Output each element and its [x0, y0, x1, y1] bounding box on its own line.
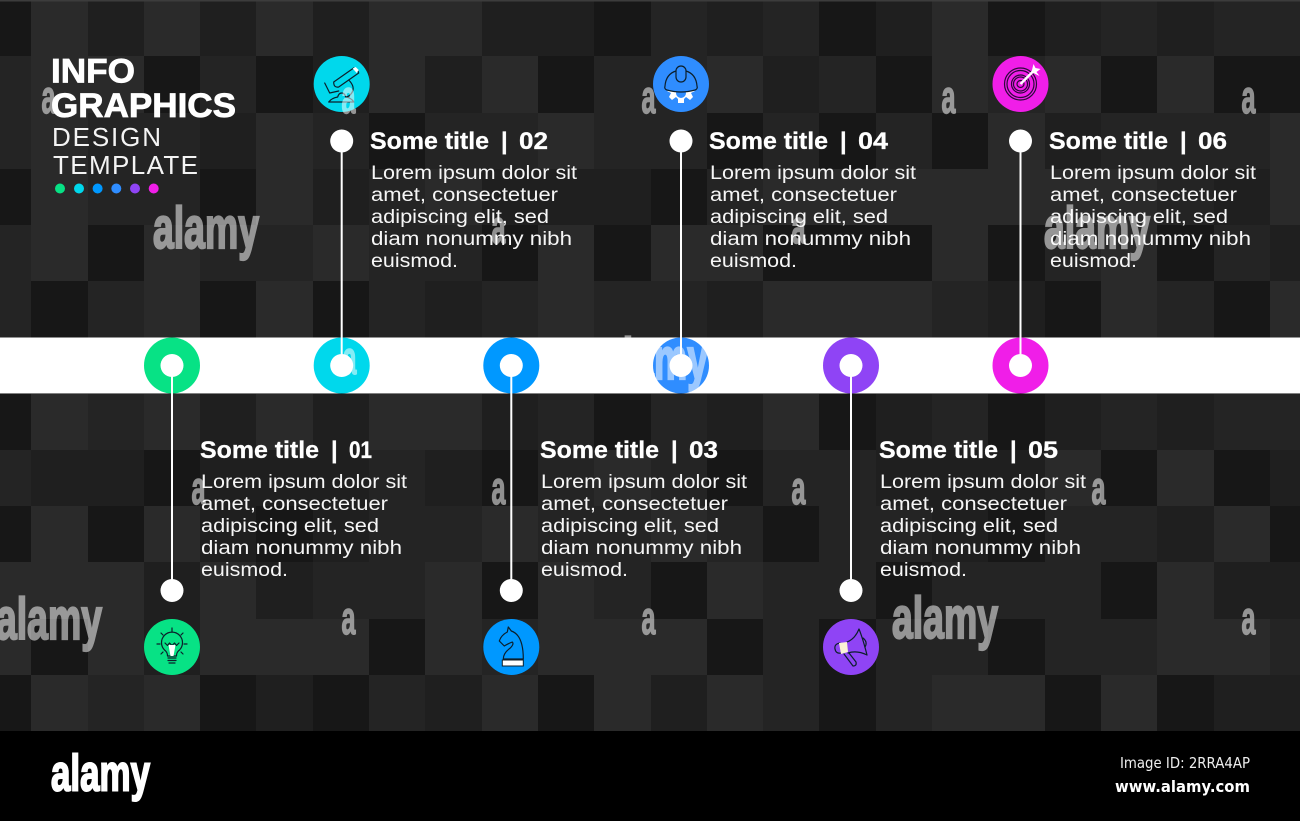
title 06: Some title: [1049, 128, 1168, 155]
body text 02: Lorem ipsum dolor sit: [371, 163, 578, 184]
body text 03: Lorem ipsum dolor sit: [541, 472, 748, 493]
title 01: [200, 437, 372, 464]
body text 01: euismod.: [201, 560, 288, 581]
connector 01: [160, 365, 184, 602]
title 05: 05: [1028, 437, 1058, 464]
title 04: 04: [858, 128, 889, 155]
body text 02: amet, consectetuer: [371, 185, 559, 206]
title 02: Some title: [370, 128, 489, 155]
body text 04: [710, 163, 917, 272]
connector 05: [840, 365, 862, 602]
watermarks: a: [1242, 592, 1256, 644]
icon: light bulb: [144, 619, 200, 675]
watermarks: a: [792, 462, 806, 514]
body text 04: adipiscing elit, sed: [710, 207, 888, 228]
title 03: 03: [689, 437, 718, 464]
watermarks: [0, 71, 1256, 652]
body text 06: adipiscing elit, sed: [1050, 207, 1228, 228]
watermarks: alamy: [892, 586, 998, 651]
body text 04: euismod.: [710, 251, 797, 272]
footer logo: alamy: [51, 744, 150, 802]
body text 04: Lorem ipsum dolor sit: [710, 163, 917, 184]
title: INFO: INFO: [51, 52, 135, 90]
body text 03: adipiscing elit, sed: [541, 516, 719, 537]
connector 06: [1009, 130, 1032, 365]
title 02: |: [501, 128, 508, 155]
step 01: [144, 338, 408, 675]
title 04: Some title: [709, 128, 828, 155]
node ring 02: [314, 338, 370, 394]
body text 05: adipiscing elit, sed: [880, 516, 1058, 537]
body text 03: diam nonummy nibh: [541, 538, 742, 559]
step 04: [653, 56, 917, 394]
body text 05: [880, 472, 1087, 581]
watermarks: a: [492, 462, 506, 514]
colour dots: [55, 184, 159, 194]
body text 01: adipiscing elit, sed: [201, 516, 379, 537]
title 04: |: [840, 128, 847, 155]
footer image id: Image ID: 2RRA4AP: [1120, 754, 1250, 772]
subtitle: TEMPLATE: TEMPLATE: [53, 150, 198, 180]
watermarks: a: [192, 462, 206, 514]
title 02: [370, 128, 548, 155]
icon: chess knight: [483, 619, 539, 675]
body text 03: amet, consectetuer: [541, 494, 729, 515]
node ring 01: [144, 338, 200, 394]
watermarks: a: [942, 71, 956, 123]
node ring 06: [992, 338, 1048, 394]
icon: target with arrow: [992, 56, 1048, 112]
title 05: [879, 437, 1058, 464]
body text 05: amet, consectetuer: [880, 494, 1068, 515]
connector 03: [500, 365, 523, 602]
body text 05: Lorem ipsum dolor sit: [880, 472, 1087, 493]
heading block: [51, 52, 236, 194]
body text 02: [371, 163, 578, 272]
body text 03: euismod.: [541, 560, 628, 581]
watermarks: a: [342, 332, 357, 384]
body text 04: diam nonummy nibh: [710, 229, 911, 250]
watermarks: a: [1242, 71, 1256, 123]
background: lower checker grid: [0, 394, 1300, 731]
node ring 03: [483, 338, 539, 394]
body text 05: diam nonummy nibh: [880, 538, 1081, 559]
connector 02: [330, 130, 353, 365]
title 03: Some title: [540, 437, 659, 464]
subtitle: DESIGN: DESIGN: [52, 122, 161, 152]
watermarks: a: [792, 201, 806, 253]
title 01: 01: [349, 437, 372, 464]
body text 06: [1050, 163, 1257, 272]
watermarks: a: [492, 201, 506, 253]
watermarks: alamy: [0, 587, 102, 652]
step 06: [992, 56, 1257, 394]
body text 05: euismod.: [880, 560, 967, 581]
body text 01: Lorem ipsum dolor sit: [201, 472, 408, 493]
watermarks: alamy: [153, 196, 259, 261]
watermarks: a: [342, 71, 356, 123]
body text 04: amet, consectetuer: [710, 185, 898, 206]
watermarks: a: [42, 71, 56, 123]
body text 01: diam nonummy nibh: [201, 538, 402, 559]
step 02: [314, 56, 578, 394]
title 01: |: [331, 437, 338, 464]
watermarks: alamy: [1044, 196, 1150, 261]
title 06: [1049, 128, 1227, 155]
title 05: Some title: [879, 437, 998, 464]
body text 06: euismod.: [1050, 251, 1137, 272]
body text 03: [541, 472, 748, 581]
watermarks: a: [342, 592, 356, 644]
title 02: 02: [519, 128, 548, 155]
timeline bar: [0, 338, 1300, 394]
watermarks: a: [1092, 462, 1106, 514]
title 06: 06: [1198, 128, 1227, 155]
body text 01: [201, 472, 408, 581]
step 03: [483, 338, 748, 675]
title 04: [709, 128, 889, 155]
connector 04: [670, 130, 692, 365]
footer url: www.alamy.com: [1115, 777, 1250, 796]
body text 02: diam nonummy nibh: [371, 229, 572, 250]
title 03: |: [671, 437, 678, 464]
body text 06: diam nonummy nibh: [1050, 229, 1251, 250]
body text 06: amet, consectetuer: [1050, 185, 1238, 206]
title 06: |: [1180, 128, 1187, 155]
title: GRAPHICS: GRAPHICS: [51, 87, 236, 125]
node ring 04: [653, 338, 709, 394]
icon: helmet with gear: [653, 56, 709, 112]
title 05: |: [1010, 437, 1017, 464]
background: upper checker grid: [0, 2, 1300, 338]
watermarks: a: [642, 592, 656, 644]
watermarks: a: [642, 71, 656, 123]
footer band: [0, 731, 1300, 821]
title 01: Some title: [200, 437, 319, 464]
icon: microscope: [314, 56, 370, 112]
body text 02: adipiscing elit, sed: [371, 207, 549, 228]
body text 02: euismod.: [371, 251, 458, 272]
node ring 05: [823, 338, 879, 394]
body text 06: Lorem ipsum dolor sit: [1050, 163, 1257, 184]
watermarks: alamy: [602, 327, 708, 392]
icon: megaphone: [823, 619, 879, 675]
step 05: [823, 338, 1087, 675]
title 03: [540, 437, 718, 464]
body text 01: amet, consectetuer: [201, 494, 389, 515]
